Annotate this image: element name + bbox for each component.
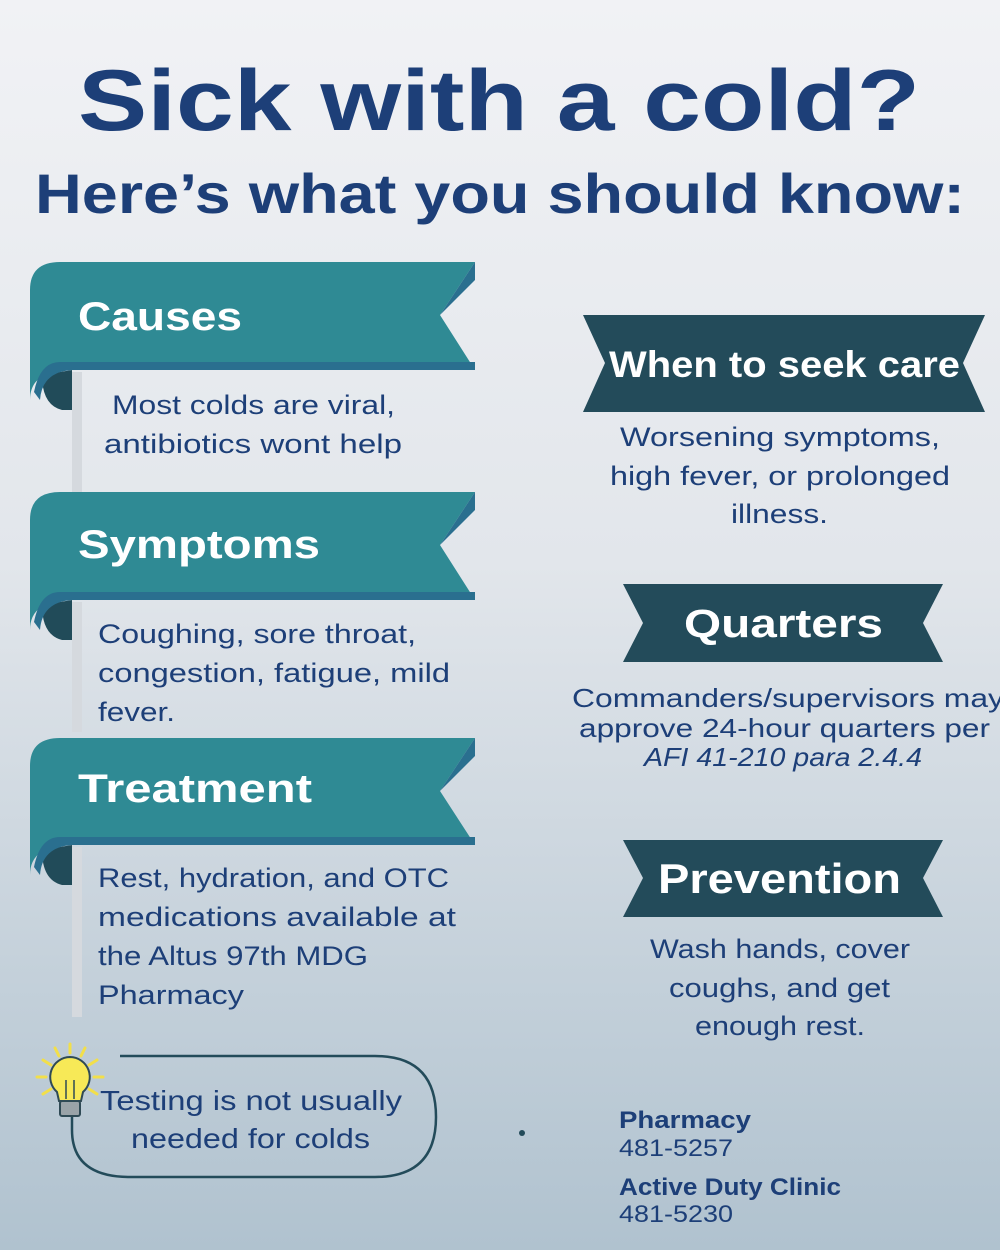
panel: causes: Most colds are viral, — [112, 390, 395, 420]
panel: symptoms: fever. — [98, 697, 175, 727]
title: Here’s what you should know: — [35, 162, 965, 225]
contact info: Pharmacy — [619, 1107, 752, 1134]
contact info: Active Duty Clinic — [619, 1174, 841, 1201]
panel: quarters: Quarters — [684, 602, 883, 646]
panel: when to seek care: Worsening symptoms, — [620, 422, 940, 452]
panel: causes: Causes — [78, 295, 242, 339]
panel: prevention — [623, 840, 943, 1041]
panel: when to seek care: illness. — [731, 499, 828, 529]
panel: treatment: Treatment — [78, 767, 312, 811]
contact info: 481-5230 — [619, 1201, 733, 1228]
panel: prevention: enough rest. — [695, 1011, 865, 1041]
panel: treatment: Pharmacy — [98, 980, 245, 1010]
panel: symptoms — [30, 492, 475, 732]
panel: prevention: Wash hands, cover — [650, 934, 910, 964]
panel: when to seek care: high fever, or prolonged — [610, 461, 950, 491]
panel: causes — [30, 262, 475, 492]
panel: treatment: the Altus 97th MDG — [98, 941, 368, 971]
panel: quarters: approve 24-hour quarters per — [579, 713, 990, 743]
title: Sick with a cold? — [78, 53, 920, 149]
panel: symptoms: congestion, fatigue, mild — [98, 658, 450, 688]
panel: prevention: coughs, and get — [669, 973, 891, 1003]
panel: symptoms: Symptoms — [78, 523, 320, 567]
panel: causes: antibiotics wont help — [104, 429, 402, 459]
panel: treatment: Rest, hydration, and OTC — [98, 863, 449, 893]
contact info — [519, 1107, 841, 1228]
panel: quarters: AFI 41-210 para 2.4.4 — [642, 742, 922, 772]
icon: light bulb — [37, 1044, 103, 1116]
panel: treatment — [30, 738, 475, 1017]
panel: prevention: Prevention — [658, 855, 901, 902]
panel: quarters — [572, 584, 1000, 772]
callout: testing: needed for colds — [131, 1123, 370, 1154]
callout: testing: Testing is not usually — [100, 1085, 402, 1116]
callout: testing — [37, 1044, 436, 1177]
panel: symptoms: Coughing, sore throat, — [98, 619, 416, 649]
title — [35, 53, 965, 225]
contact info: 481-5257 — [619, 1135, 733, 1162]
panel: when to seek care — [583, 315, 985, 529]
panel: quarters: Commanders/supervisors may — [572, 683, 1000, 713]
panel: when to seek care: When to seek care — [609, 344, 960, 385]
panel: treatment: medications available at — [98, 902, 457, 932]
